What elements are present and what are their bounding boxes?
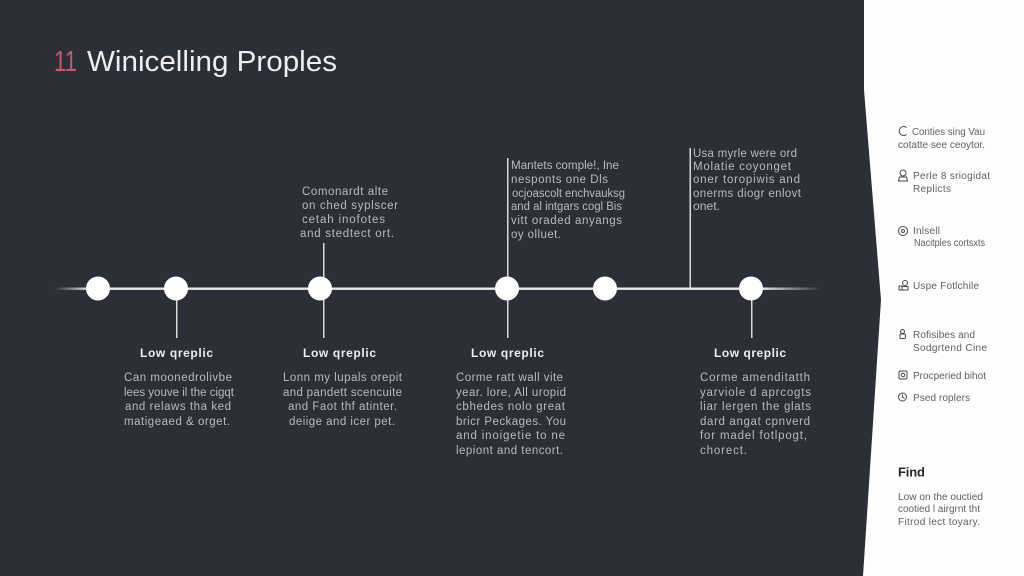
lower text block: column 3 [456,346,566,457]
sidebar item 1: cotatte see ceoytor. [898,140,985,151]
sidebar item 2: Perle 8 sriogidat [913,171,990,182]
upper text block: node 5: onet. [693,201,720,213]
upper text block: node 4: ocjoascolt enchvauksg [512,188,625,200]
sidebar text: Find description: Low on the ouctied [898,492,983,503]
upper text block: node 3: cetah inofotes [302,214,385,226]
icon: people [899,280,908,290]
icon: person [898,170,908,181]
icon: square [899,371,907,379]
sidebar item 1: Conties sing Vau [912,127,985,138]
lower text block: column 1: matigeaed & orget. [124,416,230,428]
lower text block: column 3: lepiont and tencort. [456,445,563,457]
sidebar item 7: Psed roplers [913,393,970,404]
sidebar text: Find description [898,492,983,528]
sidebar item 3: Inlsell [913,226,940,237]
upper text block: node 4: vitt oraded anyangs [511,215,622,227]
lower text block: column 1: lees youve il the cigqt [124,387,235,399]
lower text block: column 3: Corme ratt wall vite [456,372,563,384]
upper text block: node 5: Molatie coyonget [693,161,792,173]
lower text block: column 2: and pandett scencuite [283,387,402,399]
upper text block: node 3 [300,186,398,240]
lower text block: column 4: yarviole d aprcogts [700,387,811,399]
icon: badge [900,330,906,338]
panel: white sidebar [863,0,1024,576]
lower text block: column 4: liar lergen the glats [700,401,811,413]
lower text block: column 4: chorect. [700,445,747,457]
upper text block: node 3: Comonardt alte [302,186,388,198]
lower text block: column 3: bricr Peckages. You [456,416,566,428]
lower text block: column 4: for madel fotlpogt, [700,430,807,442]
title: Winicelling Proples [87,46,337,78]
upper text block: node 5 [693,148,802,213]
lower text block: column 4: dard angat cpnverd [700,416,810,428]
lower text block: column 2: Low qreplic [303,346,376,360]
lower text block: column 3: Low qreplic [471,346,544,360]
lower text block: column 4: Low qreplic [714,346,786,360]
upper text block: node 4: Mantets comple!, Ine [511,160,619,172]
lower text block: column 1: and relaws tha ked [125,401,231,413]
sidebar item 5: Sodgrtend Cine [913,343,987,354]
sidebar item 2: Replicts [913,184,951,195]
lower text block: column 3: cbhedes nolo great [456,401,566,413]
sidebar item 6: Procperied bihot [913,371,986,382]
sidebar item 5 [900,330,987,354]
upper text block: node 5: oner toropiwis and [693,174,800,186]
sidebar item 3: Nacitples cortsxts [914,238,985,249]
upper text block: node 3: and stedtect ort. [300,228,394,240]
lower text block: column 1: Low qreplic [140,346,213,360]
title: 11 [54,46,77,78]
icon: clock [898,393,906,401]
lower text block: column 3: year. lore, All uropid [456,387,566,399]
sidebar item 5: Rofisibes and [913,330,975,341]
icon: open circle [899,126,906,136]
lower text block: column 2: and Faot thf atinter. [288,401,397,413]
lower text block: column 2 [283,346,403,428]
sidebar heading: Find: Find [898,464,925,480]
lower text block: column 2: deiige and icer pet. [289,416,395,428]
sidebar item 2 [898,170,990,195]
upper text block: node 4: and al intgars cogl Bis [511,201,622,213]
upper text block: node 5: onerms diogr enlovt [693,188,802,200]
lower text block: column 1: Can moonedrolivbe [124,372,232,384]
sidebar text: Find description: Fitrod lect toyary. [898,517,980,528]
upper text block: node 5: Usa myrle were ord [693,148,797,160]
icon: ring [898,226,908,236]
upper text block: node 3: on ched syplscer [302,200,398,212]
sidebar text: Find description: cootied l airgrnt tht [898,504,980,515]
sidebar item 4: Uspe Fotlchile [913,281,979,292]
lower text block: column 2: Lonn my lupals orepit [283,372,403,384]
upper text block: node 4: oy olluet. [511,229,561,241]
lower text block: column 1 [124,346,235,428]
timeline [55,148,822,338]
upper text block: node 4: nesponts one Dls [511,174,608,186]
sidebar item 3 [898,226,985,249]
lower text block: column 3: and inoigetie to ne [456,430,565,442]
upper text block: node 4 [511,160,625,241]
lower text block: column 4 [700,346,811,457]
lower text block: column 4: Corme amenditatth [700,372,810,384]
sidebar item 1 [898,126,985,151]
